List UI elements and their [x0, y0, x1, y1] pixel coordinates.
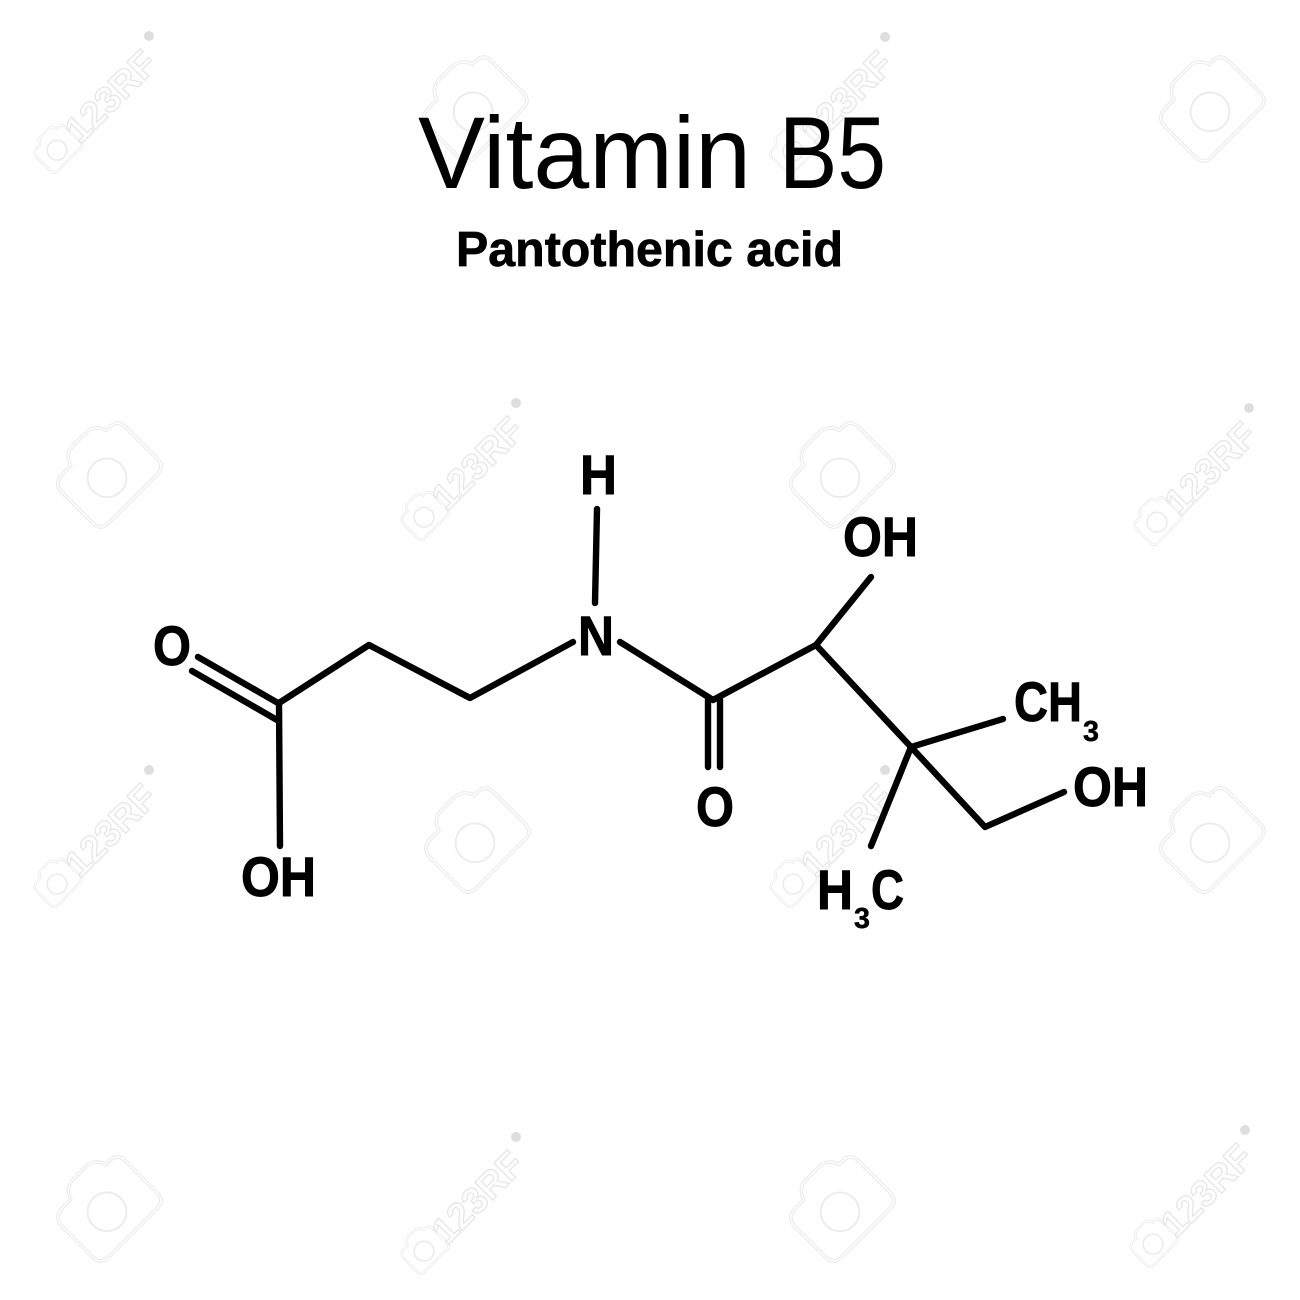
- watermark: 123RF top left: [28, 31, 165, 174]
- watermark icon: camera row 1 b: [1147, 44, 1268, 165]
- atom label: CH3: 3: [1083, 716, 1099, 748]
- watermark icon: camera row 3 b: [1147, 775, 1268, 896]
- watermark icon: camera row 2 b: [777, 410, 898, 531]
- atom label: H3C: 3: [854, 903, 870, 935]
- watermark: 123RF third row left: 123RF: [57, 776, 165, 885]
- atom label: OH (upper): OH: [843, 505, 918, 568]
- watermark: 123RF top left: 123RF: [57, 42, 165, 151]
- atom label: CH3: CH: [1014, 670, 1082, 733]
- atom label: H: H: [580, 443, 617, 506]
- atom label: H3C: H: [817, 858, 853, 921]
- atom label: H3C: C: [871, 858, 904, 921]
- watermark: 123RF third row left: [28, 765, 165, 908]
- subtitle: Pantothenic acid: [456, 223, 843, 277]
- atom label: OH (acid): OH: [241, 845, 316, 908]
- watermark: 123RF third row right: 123RF: [793, 776, 901, 885]
- carbon skeleton bonds: [192, 509, 1064, 846]
- title: Vitamin: [418, 96, 751, 210]
- watermark: 123RF second row right: 123RF: [1157, 414, 1265, 523]
- watermark icon: camera row 2 a: [44, 410, 165, 531]
- title: B5: [779, 96, 886, 210]
- watermark: 123RF bottom right: 123RF: [1153, 1136, 1261, 1245]
- watermark icon: camera row 3 a: [412, 775, 533, 896]
- watermark: 123RF second row left: [395, 398, 532, 541]
- watermark icon: camera row 4 b: [777, 1144, 898, 1265]
- watermark: 123RF bottom left: [395, 1132, 532, 1275]
- atom label: H3C: [817, 858, 904, 935]
- atom label: N: N: [578, 604, 614, 667]
- watermark: 123RF bottom left: 123RF: [424, 1143, 532, 1252]
- atom label: O (amide carbonyl): O: [696, 775, 734, 838]
- watermark: 123RF top right: 123RF: [793, 43, 901, 152]
- watermark: 123RF bottom right: [1124, 1125, 1261, 1268]
- watermark icon: camera row 1 a: [410, 44, 531, 165]
- watermark: 123RF second row left: 123RF: [424, 409, 532, 518]
- atom label: O (acid carbonyl): O: [153, 614, 191, 677]
- atom label: OH (right): OH: [1073, 755, 1148, 818]
- structural formula: pantothenic acid: [153, 443, 1148, 935]
- watermark icon: camera row 4 a: [44, 1144, 165, 1265]
- watermark: 123RF third row right: [764, 765, 901, 908]
- watermark: 123RF top right: [764, 32, 901, 175]
- watermark: 123RF second row right: [1128, 403, 1265, 546]
